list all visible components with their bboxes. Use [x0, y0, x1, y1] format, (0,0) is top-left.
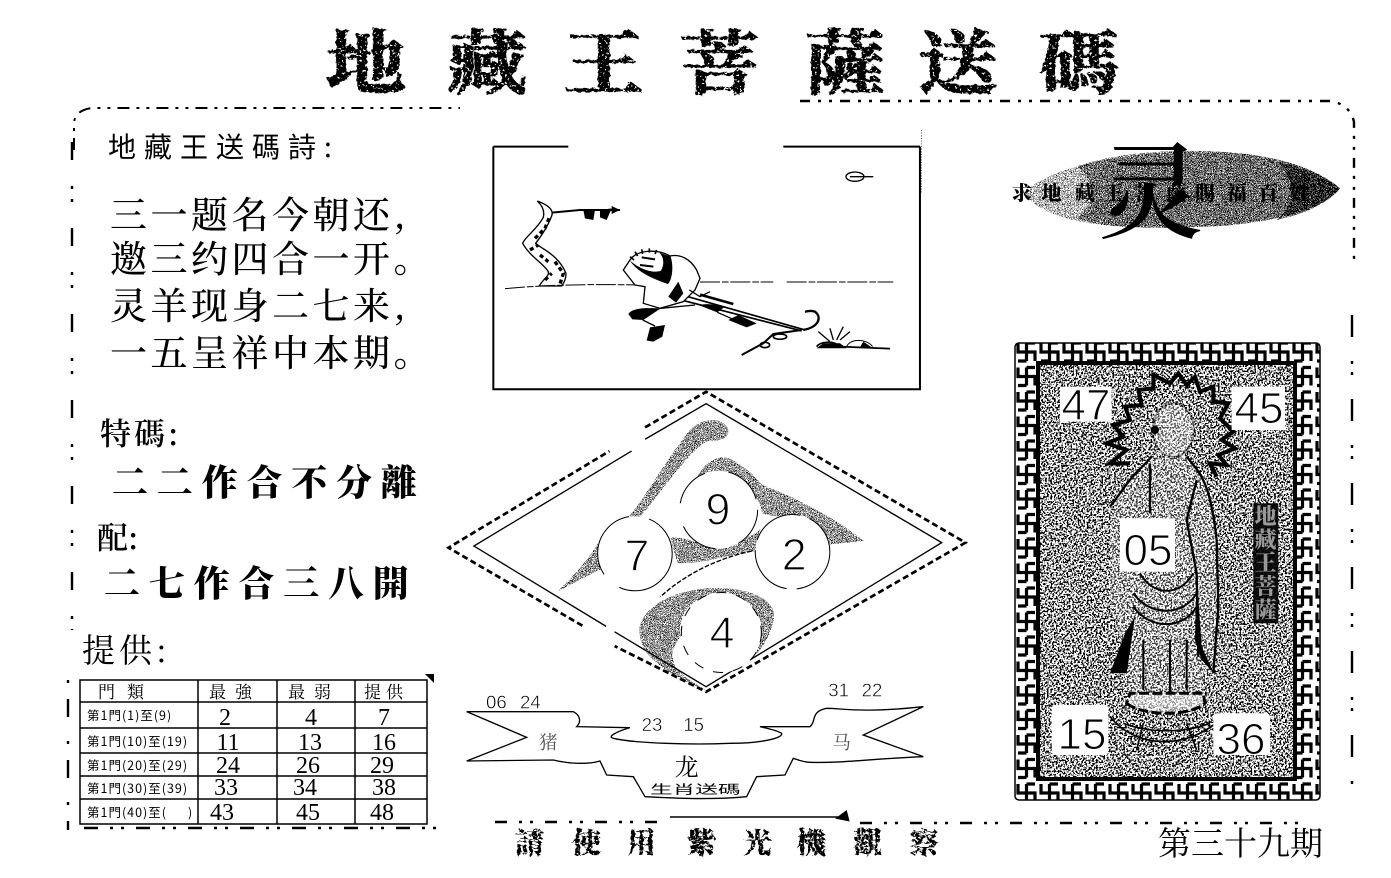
number circles — [598, 471, 830, 672]
inner diamond — [474, 404, 942, 687]
ribbon numbers: 15 — [683, 714, 704, 735]
Jizo panel — [1015, 343, 1320, 800]
table numbers: 43 — [210, 800, 234, 826]
zodiac characters: 龙 — [675, 748, 699, 783]
circle numbers: 2 — [782, 530, 807, 580]
picture frame — [493, 147, 920, 389]
table numbers: 45 — [296, 800, 320, 826]
table numbers: 29 — [370, 753, 394, 779]
number boxes — [1052, 387, 1285, 755]
table numbers: 26 — [296, 753, 320, 779]
table row labels: 第1門(40)至( — [87, 802, 167, 821]
dashed outer border — [68, 101, 1354, 830]
table header — [98, 678, 408, 703]
panel numbers: 45 — [1235, 384, 1283, 433]
panel numbers: 15 — [1058, 710, 1106, 759]
rocks and grass — [817, 327, 890, 349]
table row labels — [87, 705, 193, 821]
number table — [80, 674, 434, 826]
table numbers: 34 — [293, 775, 317, 801]
sun — [846, 172, 873, 181]
large calligraphy character: 灵 — [1098, 110, 1203, 261]
ribbon caption: 生肖送碼 — [650, 780, 741, 797]
diamond lucky number panel — [448, 392, 965, 697]
table numbers: 4 — [305, 705, 317, 731]
ribbon numbers: 31 — [828, 680, 849, 701]
special code heading: 特碼: — [100, 409, 181, 454]
outer dashed diamond — [448, 392, 965, 692]
table header: 最弱 — [288, 678, 340, 703]
table numbers: 38 — [372, 775, 396, 801]
side inscription: 地藏王菩薩 — [1255, 500, 1277, 624]
bottom instruction: 請使用紫光機觀察 — [515, 821, 939, 862]
plea text: 求地藏王菩薩賜福百姓 — [1012, 177, 1310, 206]
match text: 二七作合三八開 — [104, 556, 418, 607]
panel numbers — [1058, 381, 1283, 764]
banner: plea text on speckled lens — [1012, 142, 1340, 240]
farmer figure — [623, 248, 757, 342]
table header: 門類 — [98, 678, 156, 703]
zodiac characters — [539, 729, 851, 783]
ribbon outline — [467, 707, 923, 799]
table row labels: 第1門(30)至(39) — [87, 778, 188, 797]
halo zigzag — [1107, 373, 1235, 477]
ribbon numbers: 23 — [642, 714, 662, 735]
ground lines — [505, 282, 893, 289]
special code section — [97, 409, 426, 607]
table numbers: 13 — [298, 730, 322, 756]
connecting swoosh — [660, 551, 752, 597]
special code text: 二二作合不分離 — [112, 455, 426, 506]
circle numbers — [625, 485, 807, 658]
table row labels: 第1門(20)至(29) — [87, 755, 188, 774]
zodiac characters: 马 — [832, 729, 851, 755]
poem text block: 一五呈祥中本期。 — [110, 323, 434, 377]
match heading: 配: — [97, 513, 138, 558]
panel numbers: 36 — [1217, 715, 1265, 764]
circle numbers: 7 — [625, 531, 649, 581]
zodiac ribbon — [467, 680, 923, 799]
tree — [523, 201, 620, 286]
poem text block: 灵羊现身二七来, — [110, 276, 409, 330]
table numbers: 11 — [216, 730, 240, 756]
zodiac characters: 猪 — [539, 729, 558, 755]
table numbers: 16 — [372, 730, 396, 756]
provided by heading: 提供: — [82, 625, 171, 672]
poem text block — [110, 185, 434, 377]
table row labels: 第1門(1)至(9) — [87, 705, 172, 724]
table numbers — [210, 705, 396, 826]
ribbon numbers: 06 — [486, 691, 507, 712]
poem text block: 三一题名今朝还, — [110, 185, 409, 239]
table numbers: 2 — [219, 705, 231, 731]
ribbon numbers: 24 — [520, 691, 541, 712]
table numbers: 48 — [370, 800, 394, 826]
table header: 提供 — [364, 678, 408, 703]
ribbon numbers — [486, 680, 882, 735]
title: 地藏王菩薩送碼 — [325, 7, 1119, 108]
table numbers: 24 — [216, 753, 240, 779]
picture panel: farmer with hoe — [493, 130, 922, 389]
hoe — [645, 285, 819, 355]
table row labels: ) — [188, 802, 193, 821]
table row labels: 第1門(10)至(19) — [87, 731, 188, 750]
poem text block: 邀三约四合一开。 — [110, 229, 434, 283]
speckled lens — [1024, 152, 1340, 228]
ribbon numbers: 22 — [862, 680, 882, 701]
circle numbers: 9 — [706, 485, 730, 535]
table header: 最強 — [209, 678, 261, 703]
Jizo figure — [1110, 403, 1223, 750]
issue number: 第三十九期 — [1158, 818, 1323, 865]
panel numbers: 47 — [1062, 381, 1110, 430]
speckled swoosh shapes — [552, 416, 874, 697]
circle numbers: 4 — [710, 608, 734, 658]
key pattern border — [1015, 343, 1320, 800]
table numbers: 33 — [214, 775, 238, 801]
poem heading: 地藏王送碼詩: — [108, 126, 340, 166]
table numbers: 7 — [378, 705, 390, 731]
speckled background — [1038, 363, 1295, 779]
panel numbers: 05 — [1124, 526, 1172, 575]
